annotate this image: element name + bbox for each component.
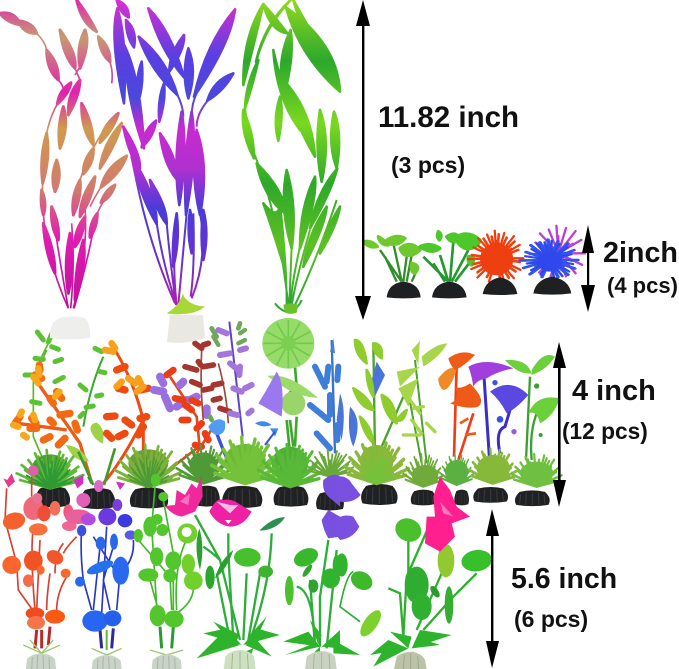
plant: green heart leaf plant	[134, 474, 203, 669]
plant: green leaves beside lotus	[333, 553, 385, 655]
plant: purple lavender plant	[213, 322, 252, 437]
label: 3 pcs: (3 pcs)	[391, 152, 465, 178]
white pots of the tall plants	[50, 315, 205, 343]
plant: small green plant one	[364, 236, 421, 298]
panel: tall plants, 11.82 inch	[0, 0, 340, 314]
label: 5.6 inch: 5.6 inch	[511, 563, 617, 595]
plant: pink flower and green plant	[370, 477, 493, 669]
plant: orange palm plant	[438, 352, 481, 460]
arrow: 5.6 inch height	[486, 509, 499, 668]
arrow: 11.82 inch height	[355, 0, 371, 320]
panel: tall flower plants, 5.6 inch	[1, 465, 341, 669]
plant: purple and red leaf plant	[154, 370, 213, 477]
plant: small blue and purple burst plant	[520, 226, 585, 295]
plant: orange heart leaf plant	[1, 465, 77, 669]
plant: magenta and gold vallisneria	[0, 0, 127, 308]
grass tufts and black bases	[17, 437, 353, 510]
plant: purple lotus flowers	[335, 476, 361, 540]
plant: purple and blue palm plant	[468, 362, 528, 457]
plant: pale green palm plant	[397, 338, 447, 463]
panel: right tall flower plant and purple lotus	[333, 476, 493, 669]
plant: pink lotus and green plant	[165, 475, 285, 669]
label: 4 inch: 4 inch	[572, 375, 656, 407]
plant: blue flower stem	[208, 419, 237, 480]
plant: dark red leaf plant	[185, 323, 240, 423]
plant: green palm plant	[505, 355, 560, 460]
plant: purple lotus and green plant	[283, 475, 341, 669]
panel: small plants, 2 inch	[364, 226, 585, 298]
plant: purple and blue vallisneria	[115, 0, 235, 314]
plant: orange and green leaf plant two	[68, 343, 148, 483]
plant: small orange burst plant	[468, 231, 523, 295]
grass tufts and black bases	[403, 449, 562, 506]
panel: medium plants right side, 4 inch	[337, 338, 562, 506]
plant: small green plant two	[420, 232, 480, 298]
plant: blue heart leaf plant	[65, 475, 137, 669]
plant: lime leaf plant	[337, 340, 408, 505]
plant: orange and green leaf plant one	[13, 332, 92, 483]
plant: green vallisneria	[243, 0, 340, 314]
panel: medium plants, 4 inch	[13, 318, 353, 510]
arrow: 2 inch height	[581, 225, 595, 312]
arrow: 4 inch height	[553, 342, 566, 507]
label: 4 pcs: (4 pcs)	[607, 273, 678, 298]
plant: purple and green disc plant	[255, 318, 315, 453]
plant: blue fern plant	[310, 338, 338, 453]
label: 11.82 inch: 11.82 inch	[378, 101, 519, 134]
label: 6 pcs: (6 pcs)	[514, 606, 588, 632]
label: 12 pcs: (12 pcs)	[562, 418, 648, 444]
label: 2inch: 2inch	[603, 237, 678, 269]
